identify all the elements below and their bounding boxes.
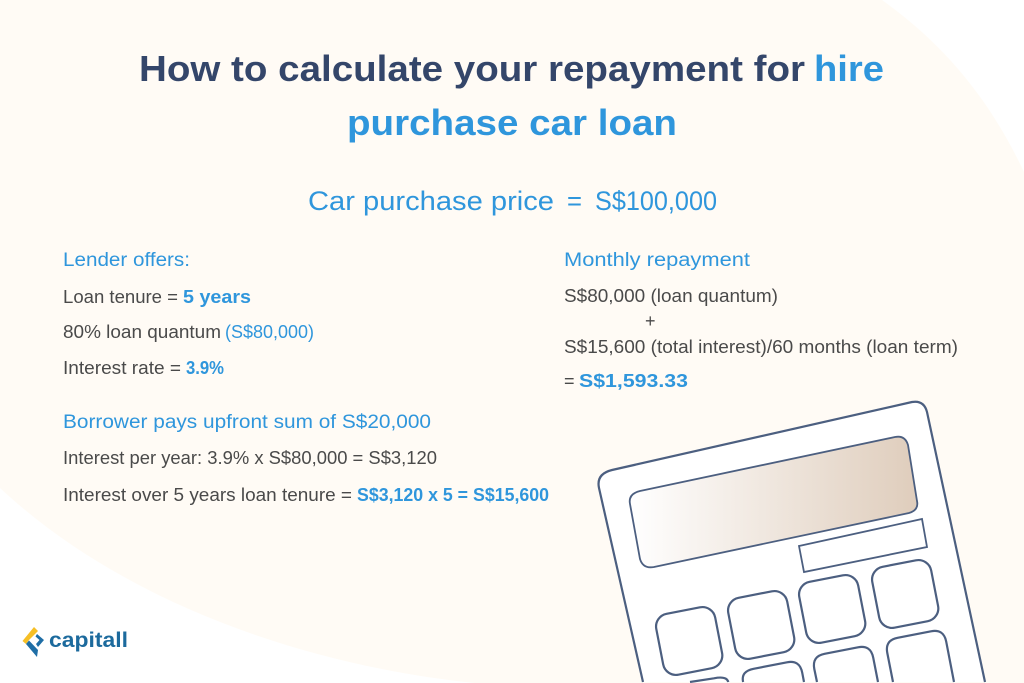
- panel: borrower pays: [63, 412, 549, 505]
- interest over tenure line: [63, 485, 549, 505]
- panel: monthly repayment: [564, 250, 958, 391]
- interest over tenure line: S$3,120 x 5 = S$15,600: [357, 485, 549, 505]
- result: =: [564, 371, 575, 391]
- interest over tenure line: Interest over 5 years loan tenure =: [63, 485, 352, 505]
- title: hire: [814, 48, 884, 89]
- plus sign: +: [645, 311, 656, 331]
- car purchase price: [308, 186, 717, 216]
- loan tenure line: 5 years: [183, 287, 251, 307]
- calculator small display: [799, 519, 927, 572]
- heading: lender offers: Lender offers:: [63, 250, 190, 271]
- interest rate line: Interest rate =: [63, 358, 181, 378]
- heading: borrower pays: Borrower pays upfront sum of S$20,000: [63, 412, 431, 433]
- interest per year line: Interest per year: 3.9% x S$80,000 = S$3,120: [63, 448, 437, 468]
- interest rate line: 3.9%: [186, 358, 224, 378]
- car purchase price: Car purchase price: [308, 186, 554, 216]
- loan tenure line: [63, 287, 251, 307]
- interest rate line: [63, 358, 224, 378]
- loan quantum amount: S$80,000 (loan quantum): [564, 286, 778, 306]
- icon: calculator: [599, 402, 985, 682]
- title: purchase car loan: [347, 102, 677, 143]
- result: S$1,593.33: [579, 371, 688, 391]
- loan tenure line: Loan tenure =: [63, 287, 178, 307]
- loan quantum line: (S$80,000): [225, 322, 314, 342]
- title: How to calculate your repayment for: [139, 48, 805, 89]
- panel: lender offers: [63, 250, 314, 378]
- logo: capitall: [22, 627, 128, 657]
- loan quantum line: [63, 322, 314, 342]
- car purchase price: S$100,000: [595, 186, 717, 216]
- loan quantum line: 80% loan quantum: [63, 322, 221, 342]
- heading: monthly repayment: Monthly repayment: [564, 250, 751, 271]
- calculator outline: [599, 402, 985, 682]
- calculator screen: [630, 437, 917, 567]
- logo wordmark: capitall: [49, 629, 128, 652]
- calculator buttons: [654, 558, 954, 682]
- logo mark: [22, 627, 44, 657]
- title: [139, 48, 884, 143]
- car purchase price: =: [567, 186, 582, 216]
- calculator body: [599, 402, 985, 682]
- total interest over term: S$15,600 (total interest)/60 months (loan term): [564, 337, 958, 357]
